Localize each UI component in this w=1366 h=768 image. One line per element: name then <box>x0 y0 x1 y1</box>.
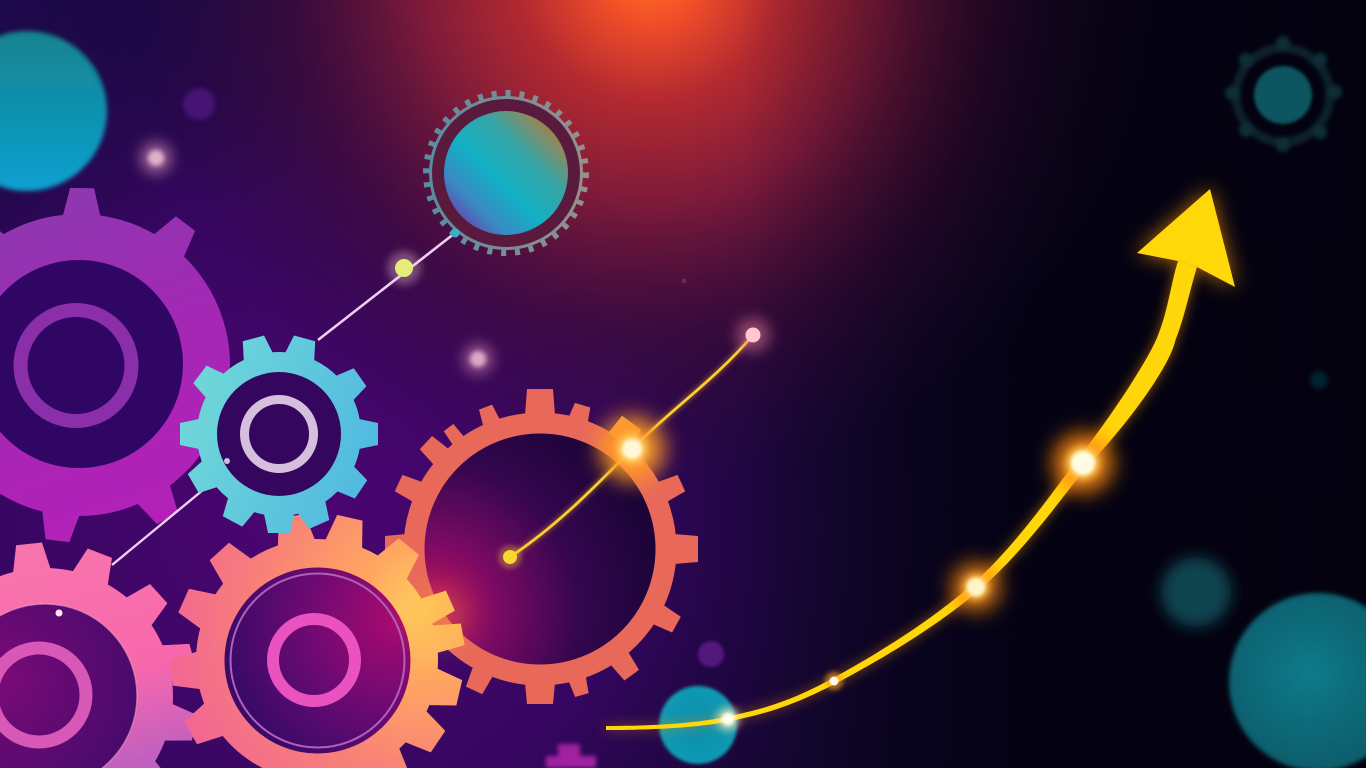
connector: yellow line in orange gear <box>498 318 770 569</box>
gear: pink bottom left <box>0 542 194 768</box>
gear: teal top <box>426 94 586 252</box>
arrow shaft <box>606 261 1197 730</box>
partial gear at bottom edge <box>546 744 596 768</box>
arrow glow <box>606 261 1197 730</box>
rising yellow arrow <box>606 189 1235 730</box>
arrow nodes <box>716 433 1113 731</box>
gear: orange ring <box>385 389 698 704</box>
gear: large purple <box>0 188 230 542</box>
glow: gear overlap <box>414 589 466 641</box>
bokeh: teal circle top left <box>0 31 107 191</box>
gear: faint teal top right <box>1225 36 1342 152</box>
gear: blue <box>180 336 378 533</box>
connector: white line from teal gear <box>318 233 455 340</box>
arrow head glow <box>1137 189 1235 287</box>
bokeh: small glows left <box>140 88 724 667</box>
gear: salmon bottom centre <box>165 510 465 768</box>
connector: white line lower left <box>112 471 226 565</box>
arrow head <box>1137 189 1235 287</box>
bokeh: teal circles bottom right <box>1161 371 1366 768</box>
teal ball near arrow start <box>659 686 737 764</box>
